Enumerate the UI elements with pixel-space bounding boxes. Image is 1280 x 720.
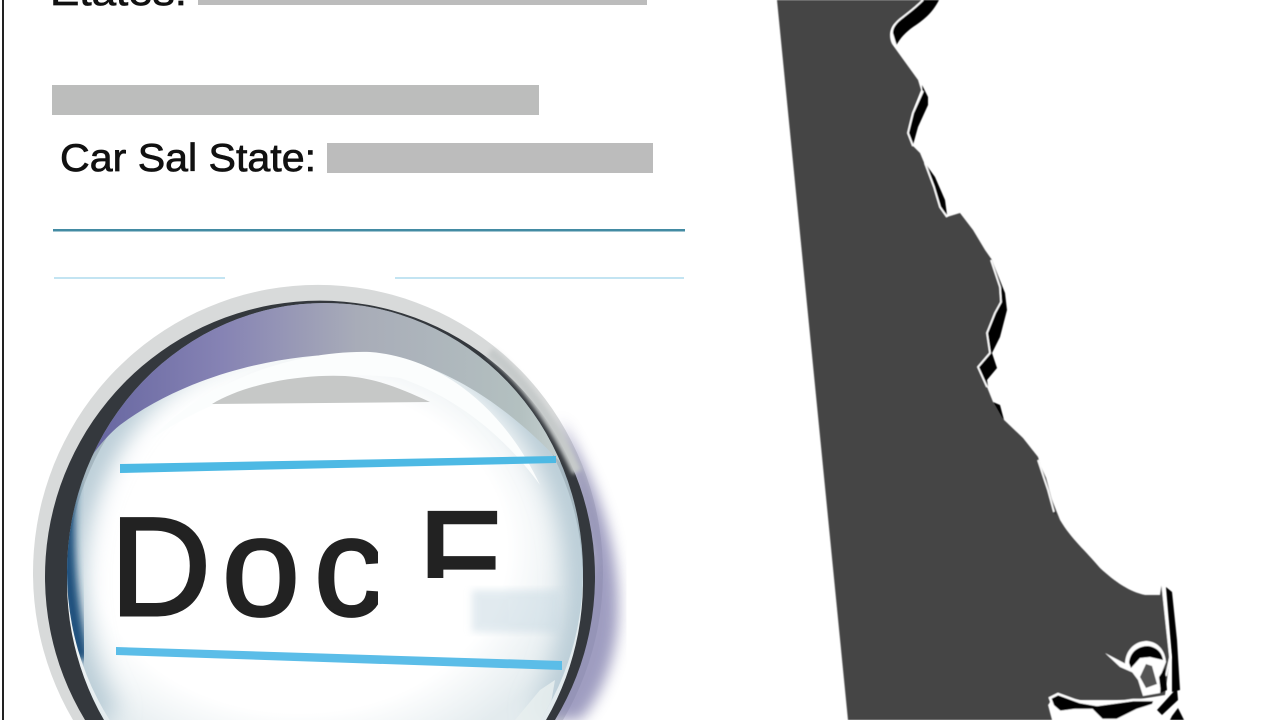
coastal shadow bands bbox=[892, 0, 1180, 692]
white sand bbox=[1062, 712, 1100, 720]
hook wedge bbox=[1105, 653, 1136, 674]
white coastline highlights bbox=[892, 0, 1170, 676]
icon: magnifying glass bbox=[33, 285, 618, 720]
redacted bar: top field bbox=[198, 0, 647, 5]
left blue shade bbox=[67, 470, 82, 660]
southern tip bbox=[1170, 708, 1184, 720]
silver outer rim bbox=[33, 285, 603, 720]
hook inlet bbox=[1105, 641, 1167, 696]
lower right glint bbox=[524, 680, 555, 720]
band: upper coast bbox=[892, 0, 939, 46]
lens blue line upper bbox=[120, 456, 556, 473]
band: thin sliver bbox=[993, 402, 1004, 420]
band: mid coast bbox=[978, 258, 1007, 387]
band: third bend bbox=[925, 163, 947, 215]
dark ring bbox=[45, 301, 595, 720]
inner pocket bbox=[1140, 664, 1157, 688]
redacted bar: car sal state value bbox=[327, 143, 653, 173]
band: second bend bbox=[907, 85, 928, 145]
purple halo bbox=[540, 420, 618, 720]
right lens panel bbox=[472, 590, 560, 632]
label: car sal state: Car Sal State: bbox=[60, 137, 316, 180]
document form bbox=[50, 0, 685, 278]
silver ring section, upper right bbox=[490, 352, 577, 472]
form rule: dark blue bbox=[53, 229, 685, 232]
magnified word: Doc bbox=[110, 488, 384, 645]
lens bbox=[67, 312, 583, 720]
big black inlet bbox=[1050, 694, 1155, 720]
state fill bbox=[777, 0, 1170, 720]
band: barrier strip bbox=[1166, 587, 1180, 692]
lower inlet bbox=[1050, 688, 1184, 720]
lens blue line lower bbox=[116, 647, 562, 670]
top reflection band bbox=[93, 303, 561, 463]
hook white backing bbox=[1125, 641, 1166, 696]
hook black bbox=[1129, 646, 1163, 668]
grey redacted bar seen through lens bbox=[212, 376, 430, 404]
band: lower coast bbox=[1038, 460, 1056, 515]
black lower-right strip bbox=[1157, 688, 1178, 715]
map: state silhouette bbox=[777, 0, 1184, 720]
edge shading bbox=[67, 312, 583, 720]
redacted bar: middle bbox=[52, 85, 539, 115]
magnified letter fragment: F bbox=[418, 483, 501, 635]
grey shoal bbox=[1095, 700, 1135, 720]
form rule: light blue bbox=[54, 277, 684, 279]
page border bbox=[2, 0, 4, 720]
white arc highlight bbox=[305, 352, 540, 484]
dark strip bbox=[1159, 668, 1167, 693]
